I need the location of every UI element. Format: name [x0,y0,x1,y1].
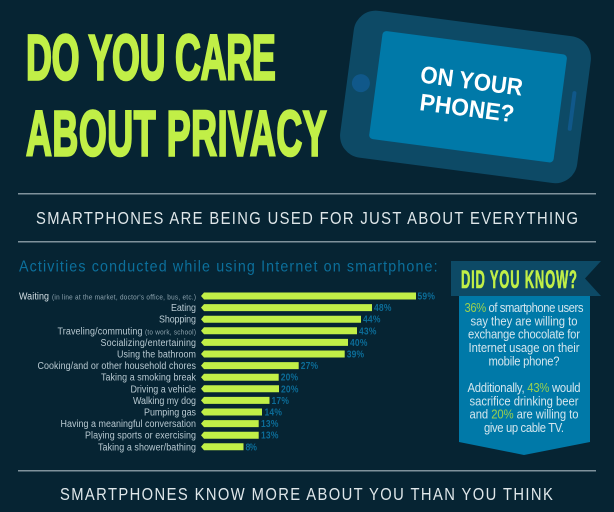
row: bathroom: 39% [347,349,364,360]
row: shower [98,442,257,454]
phone home button [351,73,371,93]
row: conversation: Having a meaningful conversation [60,418,196,430]
row: conversation [60,418,278,430]
row: socializing: 40% [350,337,367,348]
row: dog [133,395,289,407]
row: traveling: (to work, school) [145,329,196,336]
callout text [465,300,584,435]
bar chart [19,291,435,454]
row: traveling: Traveling/commuting [58,326,143,338]
row: waiting [19,291,435,303]
row: smoking: Taking a smoking break [101,372,196,384]
callout text: give up cable TV. [484,420,564,435]
title: ABOUT PRIVACY [26,98,327,169]
row: gas: 14% [264,407,282,418]
phone text [415,61,524,129]
row: socializing [100,337,367,349]
row: cooking: Cooking/and or other household chores [38,360,196,372]
callout text: Additionally, 43% would [467,380,581,395]
row: gas: Pumping gas [144,407,196,419]
callout text: exchange chocolate for [468,327,580,342]
row: driving: 20% [281,384,298,394]
row: traveling: 43% [359,326,376,336]
row: gas [144,407,282,419]
row: shower: Taking a shower/bathing [98,442,196,454]
callout text: 36% of smartphone users [465,300,584,315]
row: shopping: Shopping [159,314,196,326]
row: sports: 13% [261,430,278,441]
row: sports: Playing sports or exercising [85,430,196,442]
icon: phone [337,8,594,186]
callout body [459,296,590,455]
callout text: and 20% are willing to [470,407,579,422]
chart heading: Activities conducted while using Internet on smartphone: [19,259,438,276]
callout text: say they are willing to [470,314,578,328]
row: socializing: Socializing/entertaining [100,337,196,349]
phone speaker [567,91,577,131]
phone screen [369,31,567,163]
row: dog: Walking my dog [133,395,196,407]
phone text: ON YOUR [419,61,524,102]
row: driving: Driving a vehicle [130,384,196,396]
row: bathroom [117,349,364,361]
row: waiting: Waiting [19,291,49,303]
panel: did you know [451,261,601,455]
row: cooking [38,360,318,372]
row: bathroom: Using the bathroom [117,349,196,361]
row: sports [85,430,278,442]
phone text: PHONE? [418,89,516,128]
row: driving [130,384,298,396]
row: eating [171,302,391,314]
row: smoking: 20% [281,372,298,383]
row: eating: 48% [374,302,391,313]
row: shower: 8% [246,442,257,452]
callout text: mobile phone? [488,354,560,368]
title [26,22,327,169]
row: shopping: 44% [363,314,380,325]
row: waiting: (in line at the market, doctor's office, bus, etc.) [52,294,196,302]
row: cooking: 27% [301,360,318,371]
banner [451,261,601,296]
callout text: sacrifice drinking beer [470,394,579,408]
title: DO YOU CARE [26,22,276,93]
row: dog: 17% [272,395,289,406]
heading: everything: SMARTPHONES ARE BEING USED FOR JUST ABOUT EVERYTHING [36,209,578,228]
callout text: Internet usage on their [469,340,580,355]
heading: know more: SMARTPHONES KNOW MORE ABOUT YOU THAN YOU THINK [60,485,553,504]
row: waiting: 59% [418,291,435,302]
row: smoking [101,372,298,384]
banner heading: DID YOU KNOW? [461,267,577,294]
row: traveling [58,326,376,338]
row: shopping [159,314,380,326]
row: conversation: 13% [261,418,278,429]
row: eating: Eating [171,302,196,314]
